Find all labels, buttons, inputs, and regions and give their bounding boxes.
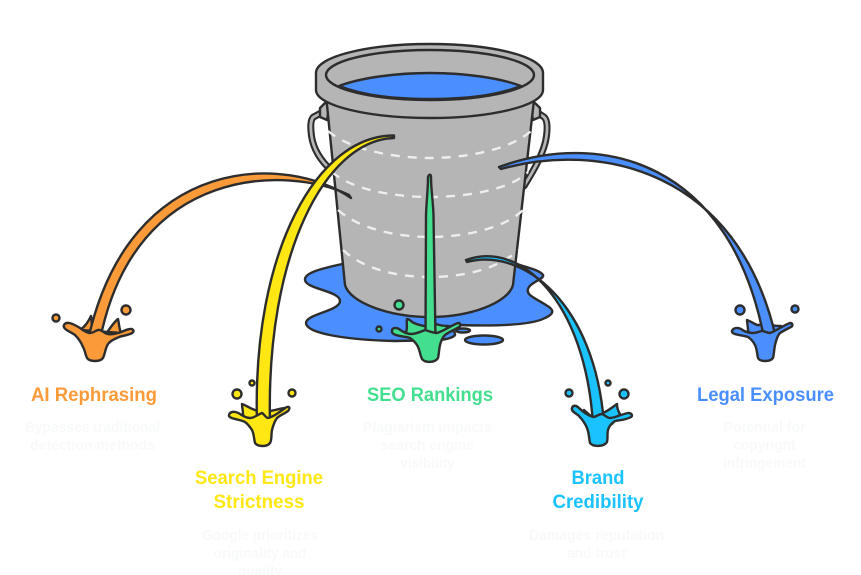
label: Legal Exposure: Legal Exposure — [697, 385, 834, 406]
droplets — [394, 300, 404, 310]
stream — [466, 256, 604, 424]
description — [723, 420, 806, 472]
label: Brand Credibility: Credibility — [552, 492, 644, 513]
description — [202, 528, 318, 575]
label: Brand Credibility: Brand — [572, 468, 624, 489]
description: visibility — [400, 456, 454, 472]
water level dashes — [328, 131, 531, 277]
left handle — [311, 103, 332, 171]
label: Search Engine Strictness: Search Engine — [195, 468, 323, 489]
description: Plagiarism impacts — [363, 420, 492, 436]
description — [529, 528, 664, 562]
front shape — [732, 323, 792, 361]
description: originality and — [214, 546, 306, 562]
description: copyright — [734, 438, 796, 454]
stream — [426, 175, 436, 338]
water surface — [339, 73, 521, 99]
back lobes — [80, 316, 121, 334]
description: detection methods — [30, 438, 155, 454]
front shape — [392, 323, 460, 362]
back lobes — [242, 404, 286, 422]
label: AI Rephrasing: AI Rephrasing — [31, 385, 157, 406]
back lobes — [747, 320, 781, 338]
label: Search Engine Strictness: Strictness — [214, 492, 304, 513]
stream — [88, 173, 351, 340]
description: infringement — [723, 456, 806, 472]
droplets — [736, 306, 744, 314]
label: AI Rephrasing — [25, 385, 160, 454]
stream — [257, 135, 394, 422]
front shape — [64, 323, 133, 361]
description: Google prioritizes — [202, 528, 318, 544]
description: Damages reputation — [529, 528, 664, 544]
droplets — [232, 390, 242, 398]
stream — [499, 153, 776, 338]
description — [25, 420, 160, 454]
front shape — [572, 406, 632, 446]
rim inner — [326, 50, 534, 100]
label: SEO Rankings: SEO Rankings — [367, 385, 493, 406]
splash: blue — [499, 153, 798, 361]
front shape — [229, 407, 289, 446]
splash: orange — [52, 173, 351, 361]
droplets — [52, 314, 60, 322]
label: Legal Exposure — [697, 385, 834, 472]
splash: cyan — [466, 256, 632, 446]
description: Bypasses traditional — [25, 420, 160, 436]
description: search engine — [381, 438, 474, 454]
back lobes — [406, 319, 448, 338]
splash: yellow — [229, 135, 394, 446]
bucket rim — [316, 44, 543, 118]
puddle under bucket — [305, 264, 552, 344]
description: Potential for — [724, 420, 806, 436]
splash: green — [376, 175, 460, 362]
description — [363, 420, 492, 472]
bucket — [311, 44, 547, 317]
label: Search Engine Strictness — [195, 468, 323, 575]
description: and trust — [567, 546, 626, 562]
label: Brand Credibility — [529, 468, 664, 562]
droplets — [566, 390, 572, 396]
bucket body — [326, 100, 534, 317]
label: SEO Rankings — [363, 385, 493, 472]
right handle — [524, 103, 547, 186]
back lobes — [584, 404, 620, 424]
